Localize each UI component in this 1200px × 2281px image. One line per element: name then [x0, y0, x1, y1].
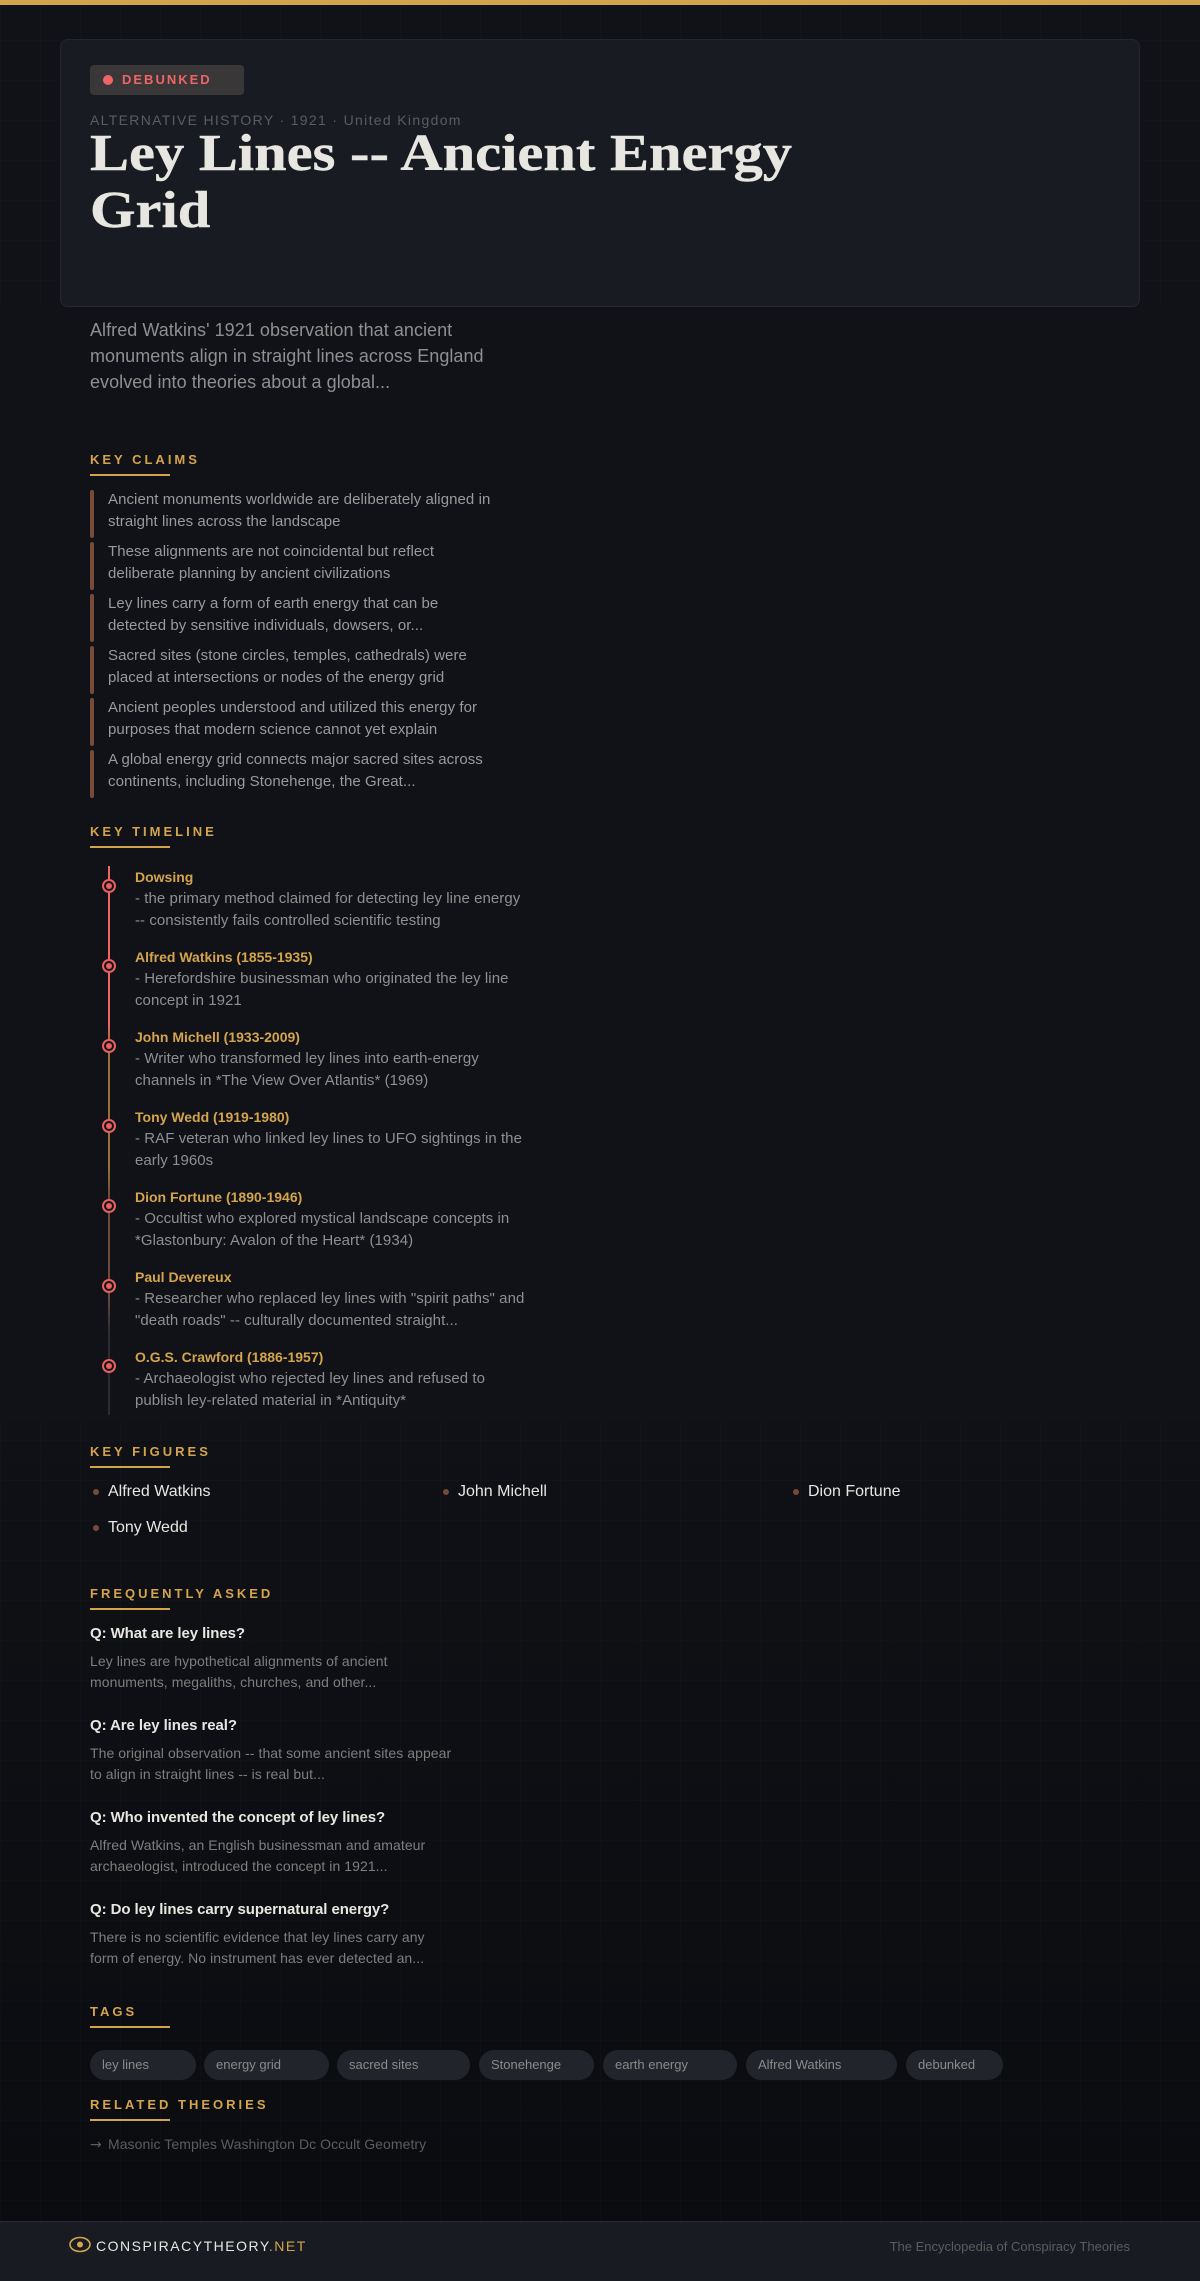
entry: Dion Fortune: *Glastonbury: Avalon of the Heart* (1934)	[135, 1232, 413, 1249]
FAQ 3: archaeologist, introduced the concept in 1921...	[90, 1858, 388, 1874]
entry: Alfred Watkins: Alfred Watkins (1855-1935)	[135, 949, 313, 965]
node 2	[102, 959, 116, 973]
FAQ 3	[90, 1809, 425, 1874]
entry: Dowsing: Dowsing	[135, 869, 193, 885]
claim 1	[90, 490, 490, 538]
entry: Tony Wedd: early 1960s	[135, 1152, 213, 1169]
entry: Paul Devereux: - Researcher who replaced ley lines with "spirit paths" and	[135, 1290, 524, 1307]
entry: O.G.S. Crawford: - Archaeologist who rejected ley lines and refused to	[135, 1370, 485, 1387]
timeline entries	[135, 869, 524, 1409]
FAQ list	[90, 1625, 451, 1966]
lead summary: evolved into theories about a global...	[90, 372, 390, 392]
title	[90, 125, 792, 239]
claim 5: Ancient peoples understood and utilized this energy for	[108, 699, 477, 716]
claim 6	[90, 750, 483, 798]
tag: Stonehenge	[479, 2050, 594, 2080]
category meta line: ALTERNATIVE HISTORY · 1921 · United Kingdom	[90, 112, 462, 128]
logo wordmark: CONSPIRACYTHEORY.NET	[96, 2238, 307, 2254]
claim 3: Ley lines carry a form of earth energy that can be	[108, 595, 438, 612]
entry: Dion Fortune	[135, 1189, 509, 1249]
claim 4: Sacred sites (stone circles, temples, cathedrals) were	[108, 647, 467, 664]
tag: energy grid: energy grid	[216, 2057, 281, 2072]
lead summary: Alfred Watkins' 1921 observation that ancient	[90, 320, 452, 340]
entry: John Michell	[135, 1029, 479, 1089]
entry: Dion Fortune: - Occultist who explored mystical landscape concepts in	[135, 1210, 509, 1227]
claim 6: A global energy grid connects major sacred sites across	[108, 751, 483, 768]
entry: Tony Wedd: - RAF veteran who linked ley lines to UFO sightings in the	[135, 1130, 522, 1147]
title: Ley Lines -- Ancient Energy	[90, 125, 792, 182]
node 3	[102, 1039, 116, 1053]
panel: hero card	[60, 39, 1140, 307]
claim 2: deliberate planning by ancient civilizations	[108, 565, 390, 582]
heading: key claims: KEY CLAIMS	[90, 452, 200, 467]
FAQ 2: Q: Are ley lines real?	[90, 1717, 237, 1734]
FAQ 4	[90, 1901, 425, 1966]
figure: Alfred Watkins: Alfred Watkins	[108, 1483, 211, 1500]
FAQ 1: Ley lines are hypothetical alignments of ancient	[90, 1653, 388, 1669]
content band background	[0, 306, 1200, 1421]
entry: Dowsing: - the primary method claimed for detecting ley line energy	[135, 890, 520, 907]
tag: ley lines: ley lines	[102, 2057, 149, 2072]
heading: tags: TAGS	[90, 2004, 137, 2019]
claim 5: purposes that modern science cannot yet explain	[108, 721, 437, 738]
node 5	[102, 1199, 116, 1213]
node 4	[102, 1119, 116, 1133]
tag: earth energy: earth energy	[615, 2057, 688, 2072]
icon: eye logo	[69, 2236, 91, 2252]
lead summary: monuments align in straight lines across England	[90, 346, 484, 366]
badge label: DEBUNKED	[122, 72, 212, 87]
key figures list	[93, 1483, 900, 1536]
FAQ 1: monuments, megaliths, churches, and other...	[90, 1674, 376, 1690]
claim 2	[90, 542, 434, 590]
figure: Dion Fortune: Dion Fortune	[808, 1483, 900, 1500]
FAQ 1: Q: What are ley lines?	[90, 1625, 245, 1642]
footer tagline: The Encyclopedia of Conspiracy Theories	[890, 2239, 1130, 2254]
entry: Dowsing	[135, 869, 520, 929]
FAQ 2	[90, 1717, 451, 1782]
FAQ 2: to align in straight lines -- is real but...	[90, 1766, 325, 1782]
FAQ 1	[90, 1625, 388, 1690]
entry: O.G.S. Crawford: O.G.S. Crawford (1886-1957)	[135, 1349, 323, 1365]
entry: John Michell: channels in *The View Over Atlantis* (1969)	[135, 1072, 428, 1089]
heading: key timeline: KEY TIMELINE	[90, 824, 217, 839]
FAQ 2: The original observation -- that some ancient sites appear	[90, 1745, 451, 1761]
tag: debunked: debunked	[918, 2057, 975, 2072]
FAQ 3: Q: Who invented the concept of ley lines?	[90, 1809, 385, 1826]
entry: Tony Wedd	[135, 1109, 522, 1169]
claim 2: These alignments are not coincidental but reflect	[108, 543, 434, 560]
FAQ 4: Q: Do ley lines carry supernatural energy?	[90, 1901, 389, 1918]
heading: frequently asked: FREQUENTLY ASKED	[90, 1586, 273, 1601]
entry: Alfred Watkins: concept in 1921	[135, 992, 242, 1009]
claim 4	[90, 646, 467, 694]
tag: sacred sites	[337, 2050, 470, 2080]
tag: Stonehenge: Stonehenge	[491, 2057, 561, 2072]
tag: energy grid	[204, 2050, 329, 2080]
footer	[0, 2221, 1200, 2281]
timeline line	[108, 866, 110, 1415]
claim 3: detected by sensitive individuals, dowsers, or...	[108, 617, 423, 634]
entry: Alfred Watkins	[135, 949, 508, 1009]
node 7	[102, 1359, 116, 1373]
FAQ 3: Alfred Watkins, an English businessman and amateur	[90, 1837, 425, 1853]
claim 1: straight lines across the landscape	[108, 513, 341, 530]
lead summary	[90, 320, 484, 392]
entry: O.G.S. Crawford	[135, 1349, 485, 1409]
tag: Alfred Watkins	[746, 2050, 897, 2080]
node 6	[102, 1279, 116, 1293]
badge dot	[103, 75, 113, 85]
figure: Tony Wedd: Tony Wedd	[108, 1519, 188, 1536]
tag: ley lines	[90, 2050, 196, 2080]
tag: Alfred Watkins: Alfred Watkins	[758, 2057, 841, 2072]
FAQ 4: form of energy. No instrument has ever detected an...	[90, 1950, 424, 1966]
figure: John Michell: John Michell	[458, 1483, 547, 1500]
title: Grid	[90, 182, 210, 239]
status badge: debunked	[90, 65, 244, 95]
claim 5	[90, 698, 477, 746]
entry: Dion Fortune: Dion Fortune (1890-1946)	[135, 1189, 302, 1205]
claim 4: placed at intersections or nodes of the energy grid	[108, 669, 444, 686]
related theory link: →	[90, 2137, 102, 2153]
entry: Tony Wedd: Tony Wedd (1919-1980)	[135, 1109, 289, 1125]
entry: John Michell: John Michell (1933-2009)	[135, 1029, 300, 1045]
entry: Paul Devereux: Paul Devereux	[135, 1269, 232, 1285]
FAQ 4: There is no scientific evidence that ley lines carry any	[90, 1929, 425, 1945]
heading: related theories: RELATED THEORIES	[90, 2097, 268, 2112]
entry: O.G.S. Crawford: publish ley-related material in *Antiquity*	[135, 1392, 406, 1409]
claim 3	[90, 594, 438, 642]
tag: earth energy	[603, 2050, 737, 2080]
entry: John Michell: - Writer who transformed ley lines into earth-energy	[135, 1050, 479, 1067]
entry: Paul Devereux: "death roads" -- culturally documented straight...	[135, 1312, 458, 1329]
panel: key claims list	[90, 490, 490, 798]
claim 6: continents, including Stonehenge, the Great...	[108, 773, 416, 790]
timeline nodes	[102, 879, 116, 1373]
tag: debunked	[906, 2050, 1003, 2080]
claim 1: Ancient monuments worldwide are deliberately aligned in	[108, 491, 490, 508]
tag list	[90, 2050, 1003, 2080]
heading: key figures: KEY FIGURES	[90, 1444, 211, 1459]
entry: Alfred Watkins: - Herefordshire businessman who originated the ley line	[135, 970, 508, 987]
related theory link: Masonic Temples Washington Dc Occult Geometry	[108, 2136, 426, 2152]
entry: Dowsing: -- consistently fails controlled scientific testing	[135, 912, 441, 929]
tag: sacred sites: sacred sites	[349, 2057, 418, 2072]
node 1	[102, 879, 116, 893]
entry: Paul Devereux	[135, 1269, 524, 1329]
top accent bar	[0, 0, 1200, 5]
